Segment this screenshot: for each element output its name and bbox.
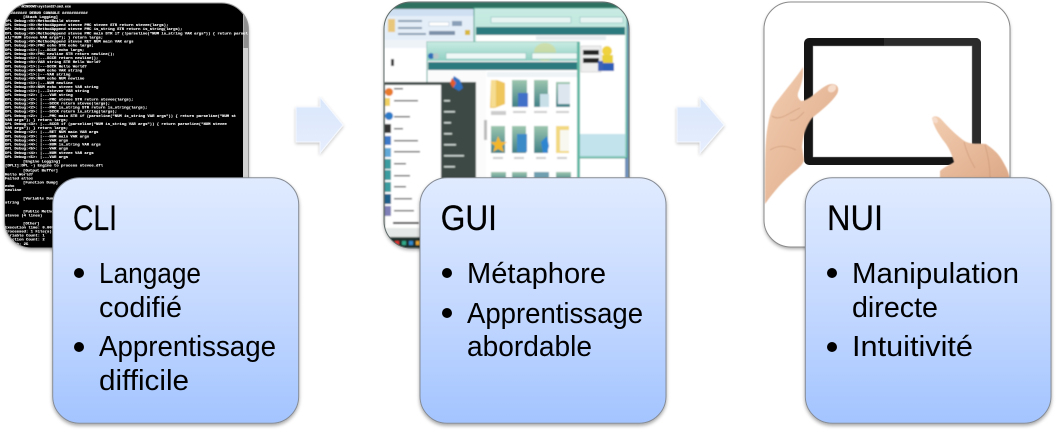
folder icons [490,80,505,108]
panel: CLI screenshot: [Function Dump] [23,180,58,186]
panel: CLI screenshot: DPL Debug:<2>: |---PMC main STR if (parseline("NUM is_string VAR args")) { return parseline("NUM st [5,114,236,119]
text: Langage codifié: codifié [99,292,182,324]
start menu [384,82,476,248]
panel: CLI screenshot: [Output Buffer] [23,168,58,174]
bullet: métaphore [442,268,452,278]
panel: CLI screenshot: [DPLI]:DPL -) Engine to process stevee.dfl [5,164,104,168]
panel: CLI screenshot: DPL Debug:<4>: |---NUM stevee VAR args [5,151,94,156]
panel: NUI description [805,178,1051,423]
panel: CLI screenshot: stevee (4 lines) [5,214,42,218]
panel: CLI screenshot: DPL Debug:<1>:|---SCCR echo largs; [5,48,84,53]
panel: CLI screenshot: [Stack Logging] [23,15,58,20]
text: Apprentissage abordable: Apprentissage [467,298,643,330]
panel: CLI screenshot: al("NUM stevee VAR args"); } return largs; [5,36,103,40]
panel: CLI screenshot [4,3,255,250]
text: Apprentissage difficile: difficile [99,365,189,397]
panel: CLI screenshot: Length: 25 [5,242,29,247]
panel: CLI screenshot: DPL Debug:<0>:MethodAppend stevee PMC stevee STR return stevee(largs); [5,23,168,28]
panel: CLI screenshot: C:\WINDOWS\system32\cmd.exe [16,4,71,10]
panel: CLI screenshot: newline [5,188,22,193]
panel: CLI screenshot: DPL Debug:<3>: |---SCCR if (parseline("NUM is_string VAR args")) { return parseline("NUM stevee [5,122,227,127]
panel: CLI screenshot: DPL Debug:<0>:MethodBuild stevee [5,19,80,24]
panel: CLI screenshot: DPL Debug:<2>: |---RET NUM main VAR args [5,130,99,135]
bullet: apprentissage [442,308,452,318]
panel: GUI screenshot [384,2,629,248]
tablet [804,38,981,165]
heading: NUI: NUI [827,199,883,238]
text: Apprentissage abordable [467,298,643,363]
arrow: CLI to GUI [296,97,343,153]
text: Manipulation directe: Manipulation [852,258,1019,290]
panel: CLI screenshot: DPL Debug:<2>: |---PMC stevee STR return stevee(largs); [5,97,133,102]
text: Apprentissage difficile [99,331,276,397]
panel: CLI screenshot: DPL Debug:<5>: |---VAR args [5,155,69,160]
panel: CLI screenshot: [Variable Dump] [23,196,58,202]
front explorer [426,40,580,160]
panel: CLI screenshot: DPL Debug:<2>: |---PMC is_string STR return is_string(largs); [5,106,147,110]
panel: CLI screenshot: DPL Debug:<0>:MethodAppend stevee RET NUM main VAR args [5,40,134,45]
panel: CLI screenshot: DPL Debug:<1>:|---SCCR return newline(); [5,56,98,61]
box: GUI background [420,178,666,423]
panel: CLI screenshot: DPL Debug:<4>: |---VAR args [5,138,69,144]
bullet: langage [74,268,84,278]
text: Apprentissage abordable: abordable [467,331,592,363]
right hand [931,116,1010,180]
text: Langage codifié [99,258,201,324]
panel: CLI screenshot: VAR args"); } return largs; [5,118,68,123]
panel: CLI screenshot: DPL Debug:<0>:NUM echo NUM newline [5,77,85,82]
panel: GUI description [420,178,666,423]
panel: CLI screenshot: VAR args"); } return largs; [5,126,68,131]
panel: CLI screenshot: DPL Debug:<1>:|---NUM newline [5,81,73,86]
heading: GUI: GUI [441,199,497,238]
panel: CLI screenshot: DPL Debug:<1>:|---VAR string [5,73,71,78]
panel: CLI screenshot: DPL Debug:<5>: |---VAR args [5,147,69,152]
panel: CLI screenshot: echo [5,184,15,189]
bullet: apprentissage [74,342,84,352]
panel: CLI screenshot: DPL Debug:<0>:NUM echo VAR string [5,68,83,73]
bullet: intuitivité [827,342,837,352]
bullet: manipulation [827,268,837,278]
panel: CLI screenshot: Variable Count: 1 [5,234,45,238]
panel: CLI screenshot: Hello World? [5,172,34,178]
left hand [765,67,838,204]
back explorer [474,8,627,158]
panel: CLI screenshot: DPL Debug:<1>:|---Istevee VAR string [5,89,90,94]
text: Apprentissage difficile: Apprentissage [99,331,276,363]
panel: CLI screenshot: Execution time: 0.005 [5,226,55,230]
panel: CLI screenshot: DPL Debug:<3>: |---SCCR return stevee(largs); [5,101,110,106]
panel: CLI screenshot: DPL Debug:<2>: |---VAR string [5,93,73,98]
text: Manipulation directe [852,258,1019,324]
panel: CLI screenshot: [Engine Logging] [23,160,60,164]
panel: CLI screenshot: DPL Debug:<0>:MethodAppend stevee PMC main STR if (!parseline("NUM is_string VAR args")) { return parseline [5,31,255,36]
panel: CLI screenshot: DPL Debug:<0>:PMC newline STR return newline(); [5,52,115,57]
panel: CLI screenshot: [Other] [23,222,39,226]
text: Métaphore: Métaphore [467,258,606,290]
panel: CLI screenshot: Failed alloc [5,176,34,182]
box: NUI background [805,178,1051,423]
panel: CLI screenshot: [Public Methods] [23,210,60,214]
text: Manipulation directe: directe [852,292,938,324]
heading: CLI: CLI [73,199,117,238]
panel: CLI screenshot: Function Count: 2 [5,238,45,242]
panel: CLI screenshot: DPL Debug:<0>:VAR string STR Hello World? [5,60,101,65]
panel: CLI screenshot: DPL Debug:<4>: |---NUM is_string VAR args [5,143,101,148]
panel: CLI screenshot: DPL Debug:<1>:|---SCCR Hello World? [5,64,87,69]
text: Langage codifié: Langage [99,258,201,290]
panel: CLI screenshot: Processed: 1 File(s) [5,230,52,234]
panel: CLI screenshot: string [5,200,20,206]
panel: CLI screenshot: DPL Debug:<3>: |---SCCR return is_string(largs); [5,110,117,115]
thumbnail and simpson [581,46,601,72]
panel: NUI photo of tablet and hands [764,2,1010,247]
text: Intuitivité: Intuitivité [852,331,973,363]
panel: CLI screenshot: DPL Debug:<3>: |---NUM main VAR args [5,134,90,139]
arrow: GUI to NUI [677,97,724,153]
panel: CLI description [53,178,299,423]
panel: CLI screenshot: ######### DEBUG CONSOLE ########### [6,12,88,16]
panel: CLI screenshot: DPL Debug:<0>:MethodAppend stevee PMC is_string STR return is_string(largs); [5,27,182,32]
box: CLI background [53,178,299,423]
panel: CLI screenshot: DPL Debug:<0>:PMC echo STR echo largs; [5,44,94,49]
panel: CLI screenshot: DPL Debug:<0>:NUM echo stevee VAR string [5,85,99,90]
